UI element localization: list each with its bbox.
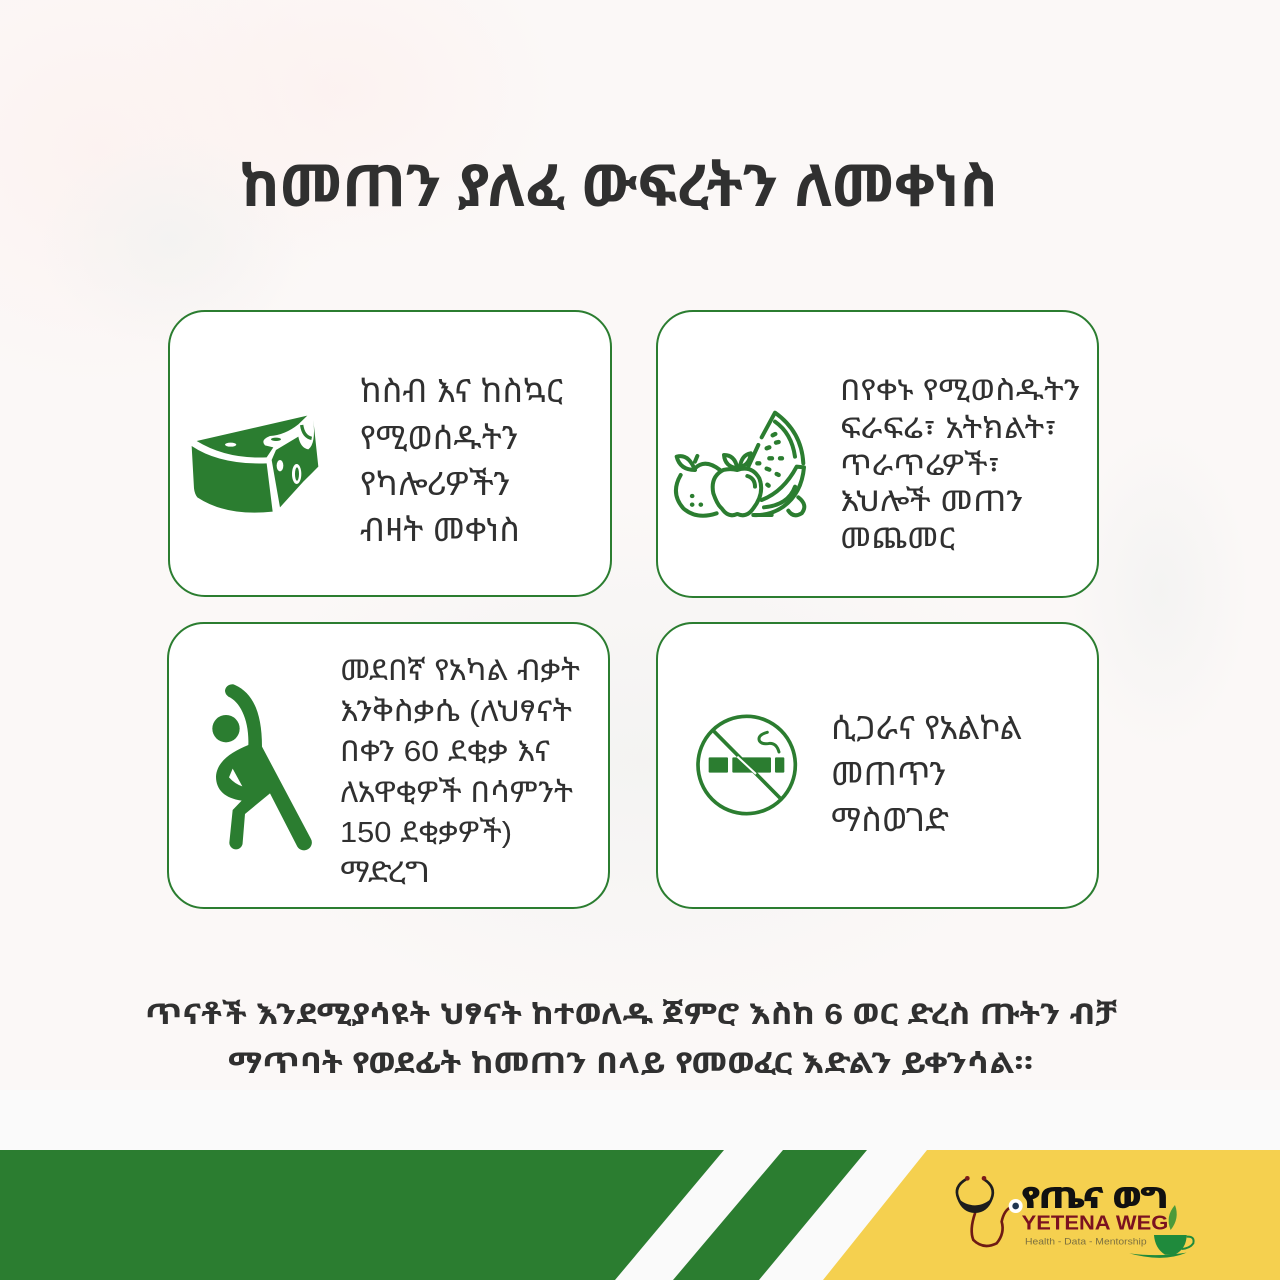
text: physical activity: ለአዋቂዎች በሳምንት	[340, 777, 573, 809]
icon: person stretching	[212, 684, 312, 850]
logo wordmark: የጤና ወግ	[1022, 1182, 1168, 1213]
icon: no smoking	[698, 716, 795, 814]
text: fruits and vegetables: በየቀኑ የሚወስዱትን	[840, 375, 1080, 407]
panel: physical activity	[168, 623, 609, 908]
text: cigarettes and alcohol: ማስወገድ	[831, 802, 949, 838]
icon: stethoscope	[957, 1176, 1023, 1246]
text: fat and sugar: ብዛት መቀነስ	[360, 512, 520, 548]
text: fruits and vegetables: ፍራፍሬ፣ አትክልት፣	[840, 413, 1057, 445]
text: fruits and vegetables: መጨመር	[840, 523, 955, 555]
text: physical activity: መደበኛ የአካል ብቃት	[340, 655, 580, 687]
icon: fruits	[676, 413, 804, 516]
text: breastfeeding note: ጥናቶች እንደሚያሳዩት ህፃናት ከተወለዱ ጀምሮ እስከ 6 ወር ድረስ ጡትን ብቻ	[145, 999, 1117, 1031]
text: fat and sugar	[360, 373, 563, 548]
logo: Yetena Weg: Health - Data - Mentorship	[1025, 1237, 1147, 1247]
text: cigarettes and alcohol	[831, 710, 1022, 838]
text: fruits and vegetables	[840, 375, 1080, 555]
text: fat and sugar: ከስብ እና ከስኳር	[360, 373, 563, 409]
text: fat and sugar: የካሎሪዎችን	[360, 466, 510, 502]
text: physical activity: በቀን 60 ደቂቃ እና	[340, 736, 550, 768]
text: breastfeeding note	[145, 999, 1117, 1080]
logo: Yetena Weg	[957, 1176, 1194, 1258]
text: physical activity: ማድረግ	[340, 857, 430, 889]
text: physical activity	[340, 655, 580, 889]
footer band	[0, 1150, 1280, 1280]
panel: reduce fat and sugar calories	[169, 311, 611, 596]
text: physical activity: እንቅስቃሴ (ለህፃናት	[340, 696, 572, 728]
text: cigarettes and alcohol: መጠጥን	[831, 756, 946, 792]
panel: increase fruits and vegetables	[657, 311, 1098, 597]
panel: avoid cigarettes and alcohol	[657, 623, 1098, 908]
logo: Yetena Weg: YETENA WEG	[1022, 1212, 1168, 1235]
icon: cheese wedge	[192, 416, 318, 513]
title: ከመጠን ያለፈ ውፍረትን ለመቀነስ	[240, 154, 998, 219]
text: cigarettes and alcohol: ሲጋራና የአልኮል	[831, 710, 1022, 746]
text: breastfeeding note: ማጥባት የወደፊት ከመጠን በላይ የመወፈር እድልን ይቀንሳል።	[228, 1048, 1033, 1080]
text: physical activity: 150 ደቂቃዎች)	[340, 817, 512, 849]
text: fruits and vegetables: እህሎች መጠን	[840, 486, 1023, 518]
text: fruits and vegetables: ጥራጥሬዎች፣	[840, 450, 1000, 482]
icon: green tea cup	[1129, 1205, 1194, 1258]
text: fat and sugar: የሚወሰዱትን	[360, 420, 518, 456]
